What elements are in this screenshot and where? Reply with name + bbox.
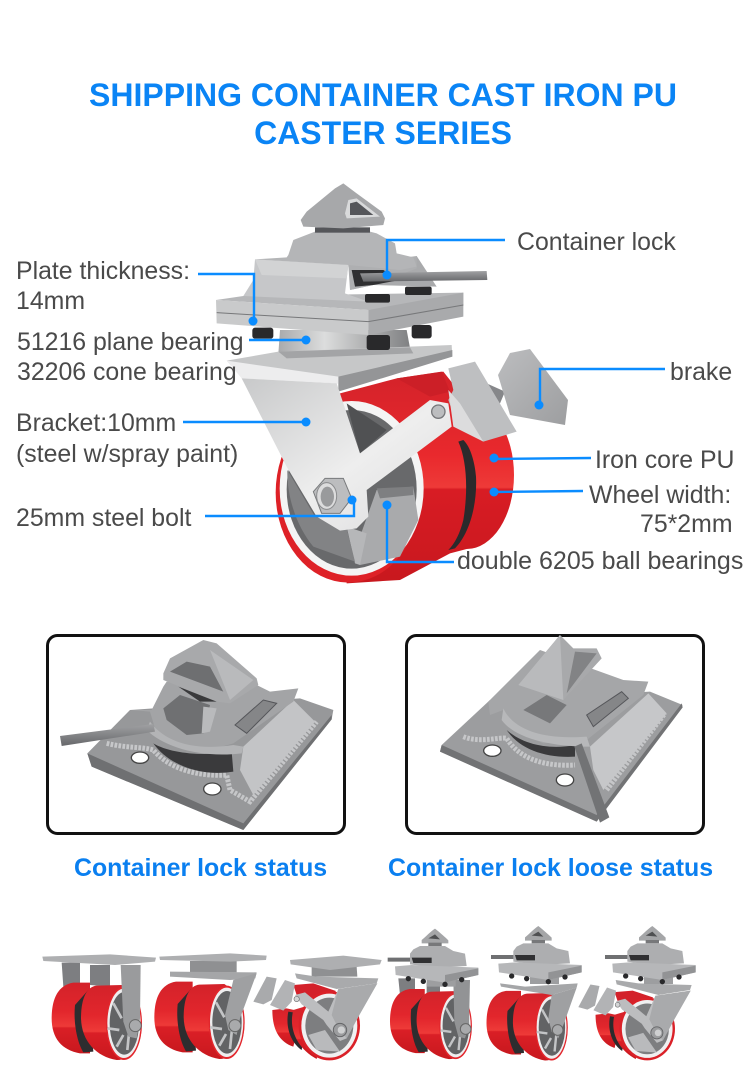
label: bracket — [16, 410, 238, 468]
caster 5: lock swivel — [486, 926, 582, 1060]
leader: brake — [534, 369, 665, 410]
block — [132, 682, 298, 750]
leader: steel bolt — [205, 496, 356, 516]
title: CASTER SERIES — [254, 115, 512, 151]
label: bracket: (steel w/spray paint) — [16, 441, 238, 468]
leader lines — [183, 240, 665, 562]
label: container lock: Container lock — [517, 229, 676, 256]
weld — [463, 713, 665, 790]
label: bracket: Bracket:10mm — [16, 410, 176, 437]
label: bearings — [17, 329, 244, 386]
label: plate thickness: 14mm — [16, 288, 85, 315]
leader: container lock — [382, 240, 505, 280]
leader: iron core — [490, 454, 591, 462]
lock head — [518, 635, 602, 700]
bolt holes — [131, 752, 221, 795]
lock head — [163, 640, 258, 703]
leader: ball bearings — [382, 500, 454, 562]
mounting plate — [216, 293, 463, 350]
label: plate thickness: Plate thickness: — [16, 258, 190, 285]
lever — [360, 271, 487, 282]
label: ball bearings: double 6205 ball bearings — [457, 547, 743, 575]
caster 4: lock rigid — [388, 929, 478, 1059]
wheels tread — [340, 372, 514, 583]
lever — [574, 743, 609, 823]
label: wheel width: Wheel width: — [589, 482, 731, 509]
label: bearings: 32206 cone bearing — [17, 359, 237, 386]
caster 6: lock swivel with brake — [578, 926, 696, 1060]
label: wheel width — [589, 482, 733, 538]
title — [89, 77, 677, 151]
caption: lock status: Container lock status — [74, 854, 327, 882]
label: brake: brake — [670, 359, 732, 386]
label: plate thickness — [16, 258, 190, 315]
weld — [107, 722, 317, 802]
lever — [60, 724, 155, 746]
leader: wheel width — [490, 488, 583, 496]
bracket — [242, 378, 452, 531]
bolt holes — [484, 745, 574, 786]
label: iron core PU: Iron core PU — [595, 447, 734, 474]
leader: plate thickness — [198, 274, 258, 326]
caster 3: swivel with brake — [253, 956, 382, 1060]
plate — [87, 698, 333, 830]
container lock head — [255, 183, 417, 270]
ramp — [240, 700, 315, 795]
upper block — [243, 256, 437, 303]
block — [488, 650, 648, 743]
caster 1: rigid — [42, 954, 156, 1060]
label: steel bolt: 25mm steel bolt — [16, 505, 191, 532]
label: wheel width: 75*2mm — [640, 511, 733, 538]
wheel hub — [276, 401, 424, 583]
leader: plane bearing — [249, 336, 310, 344]
ramp — [590, 693, 667, 790]
caster 2: swivel — [154, 953, 267, 1059]
plate — [440, 692, 683, 822]
label: bearings: 51216 plane bearing — [17, 329, 244, 356]
title: SHIPPING CONTAINER CAST IRON PU — [89, 77, 677, 113]
leader: bracket — [183, 418, 310, 426]
bearing and bracket top plate — [227, 330, 452, 392]
main caster photo — [216, 183, 568, 583]
brake — [448, 349, 568, 442]
caption: lock loose status: Container lock loose status — [388, 854, 713, 882]
panel: container lock status — [48, 636, 344, 834]
axle bolt — [313, 405, 445, 513]
panel: container lock loose status — [406, 635, 704, 834]
